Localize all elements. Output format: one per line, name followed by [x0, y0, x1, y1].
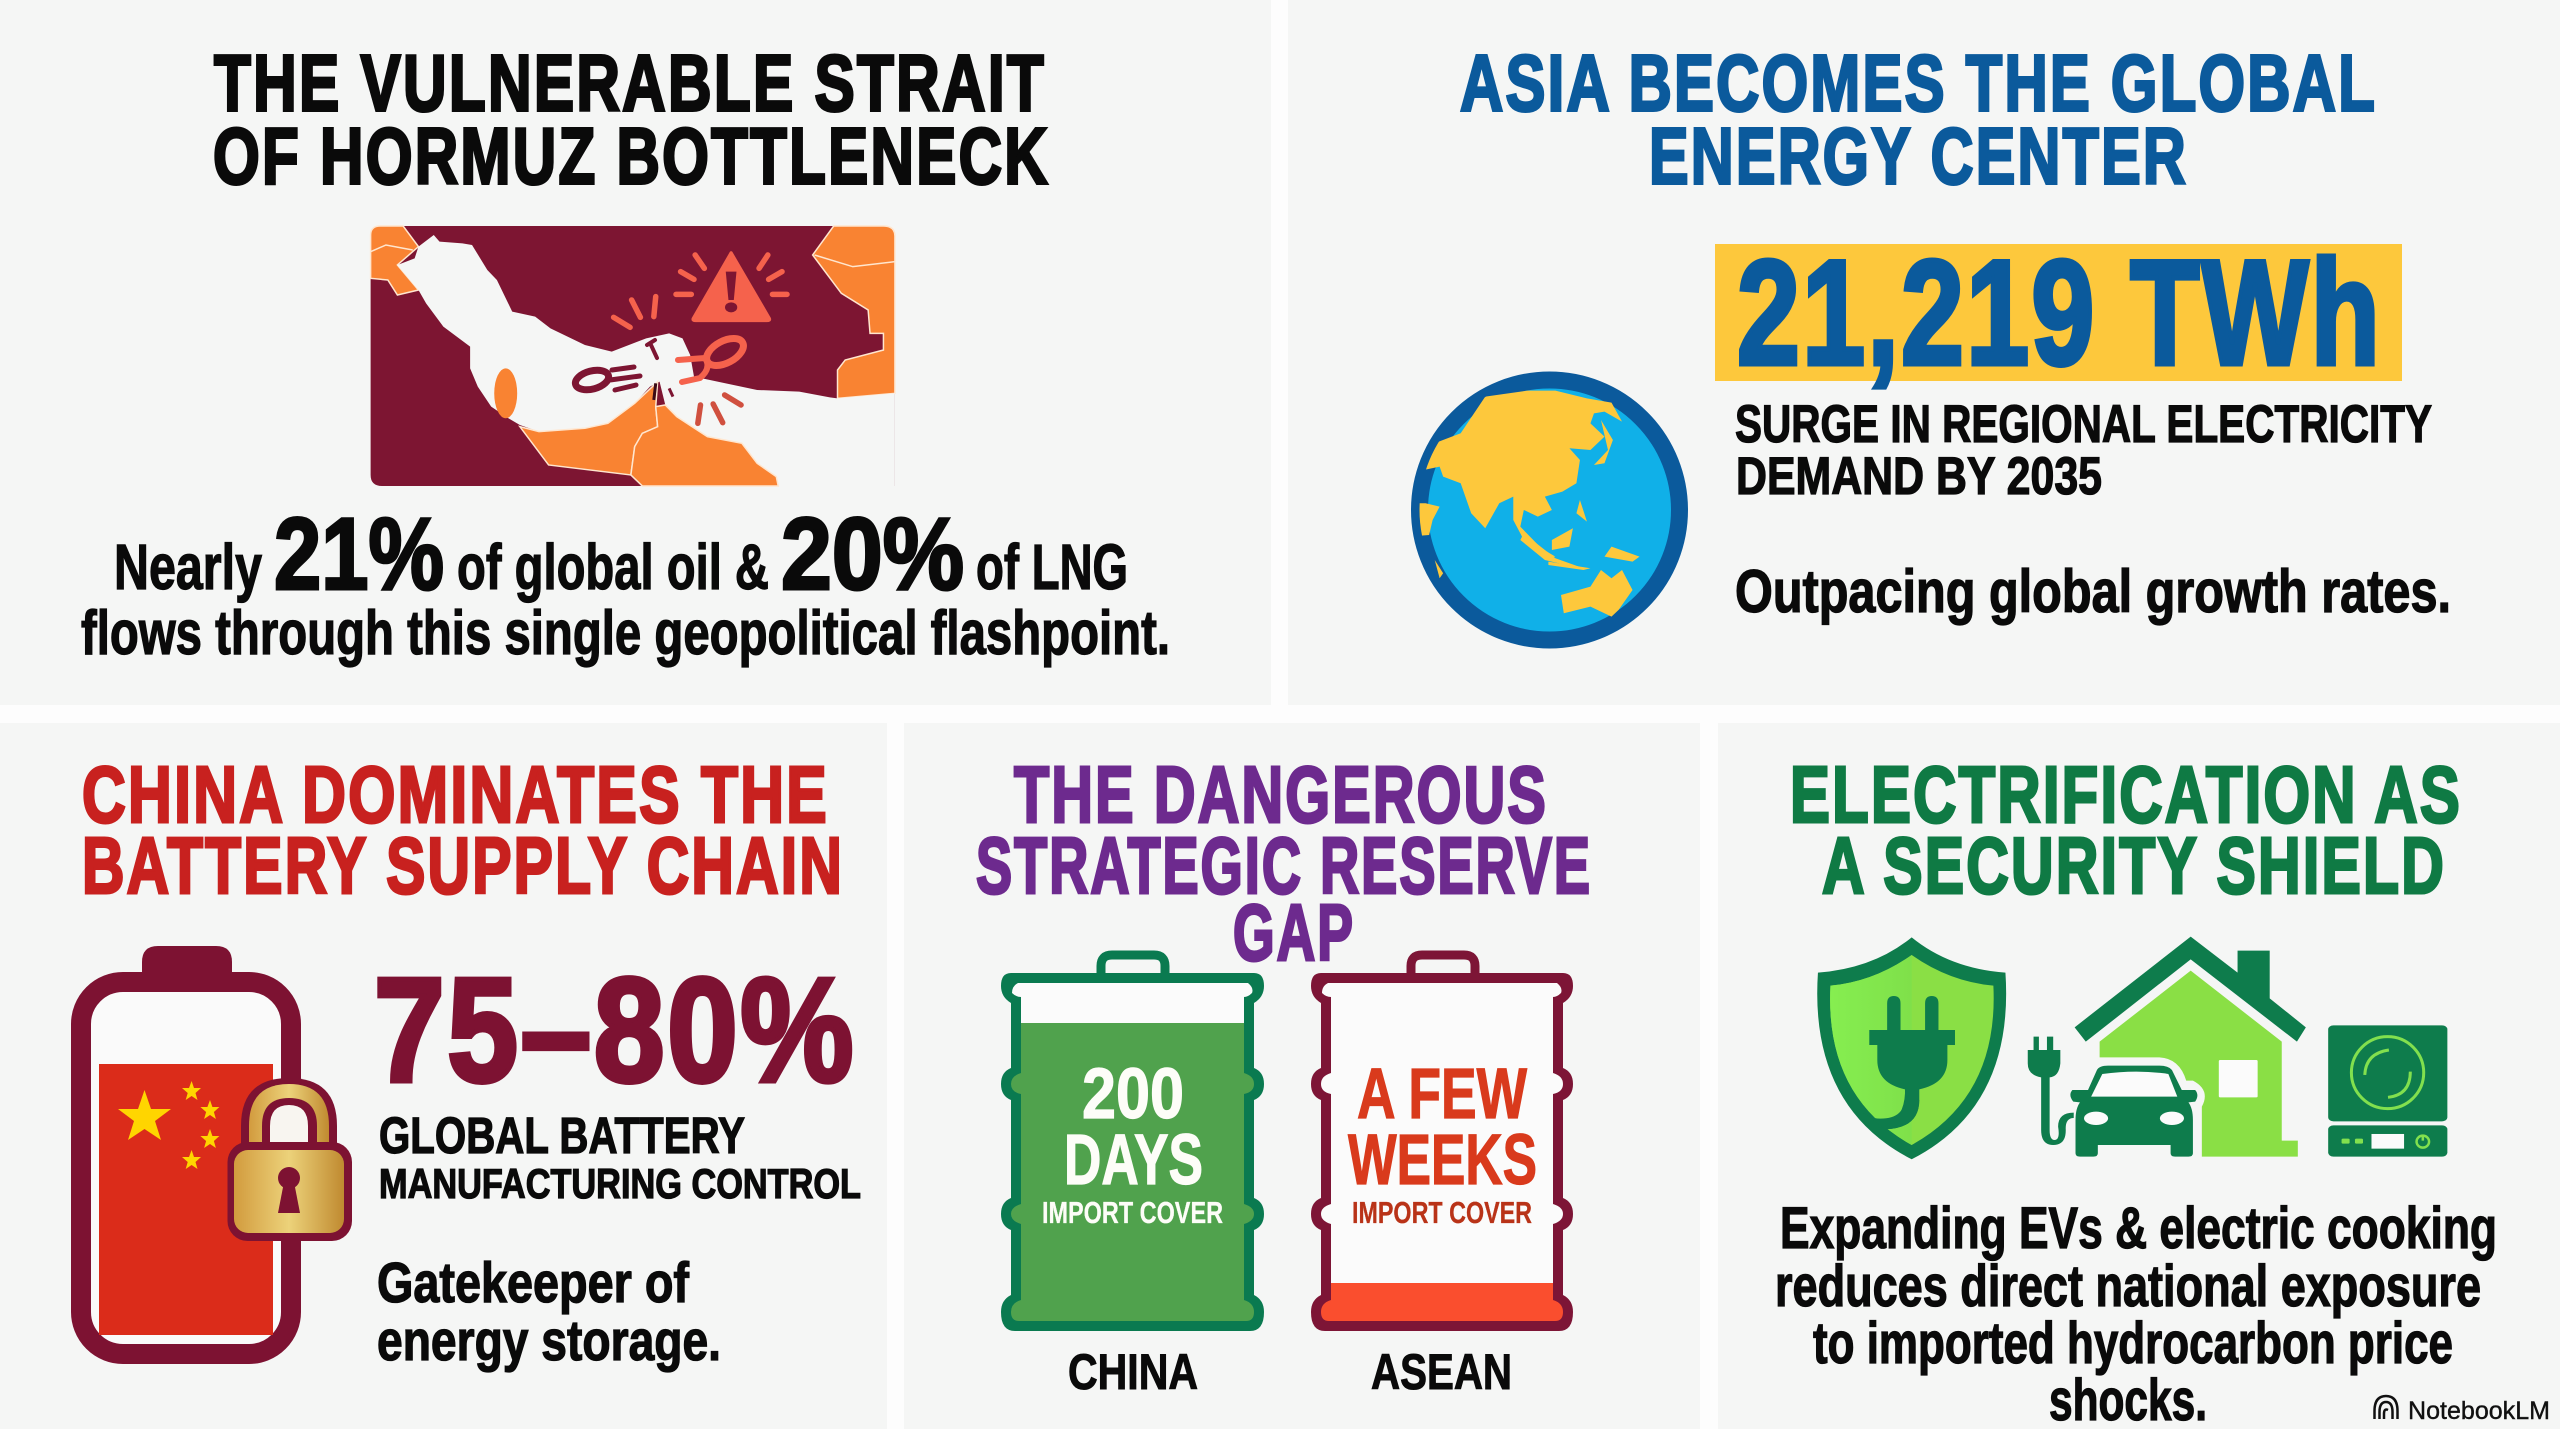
- text: 200 days import cover: [1042, 1055, 1223, 1230]
- text: gatekeeper of energy storage: energy storage.: [377, 1309, 721, 1373]
- text: surge in regional demand: [1735, 395, 2432, 506]
- heading: dangerous strategic reserve gap: STRATEGIC RESERVE: [976, 821, 1592, 910]
- icon: electric car and charger: [2028, 1037, 2197, 1157]
- text: electrification benefit: [1775, 1196, 2497, 1429]
- icons: shield, EV, house and stove: [1817, 937, 2447, 1159]
- heading: Asia becomes the global energy center: [1460, 38, 2377, 200]
- heading: China dominates: CHINA DOMINATES THE: [82, 750, 829, 839]
- heading: dangerous strategic reserve gap: GAP: [1233, 888, 1355, 977]
- panel: strategic reserve gap: [904, 723, 1700, 1429]
- icon: China oil drum, 200 days: [1001, 955, 1264, 1331]
- icon: gold padlock: [228, 1078, 352, 1241]
- heading: Asia becomes the global energy center: ENERGY CENTER: [1649, 112, 2188, 200]
- heading: China dominates: BATTERY SUPPLY CHAIN: [82, 821, 844, 910]
- icon: globe centred on Asia: [1408, 380, 1680, 640]
- text: oil and LNG share: of global oil &: [457, 531, 769, 603]
- icon: house: [2075, 937, 2306, 1157]
- stat: 75-80%: 75–80%: [374, 948, 856, 1113]
- text: surge in regional demand: DEMAND BY 2035: [1736, 447, 2102, 506]
- text: oil and LNG share: Nearly: [114, 531, 262, 603]
- text: global battery manufacturing control: MANUFACTURING CONTROL: [379, 1160, 861, 1207]
- text: oil and LNG share: of LNG: [976, 531, 1128, 603]
- text: oil and LNG share: 20%: [781, 497, 964, 611]
- logo: NotebookLM watermark: NotebookLM: [2408, 1397, 2550, 1425]
- map: Persian Gulf with broken chain and warning: [371, 226, 895, 486]
- heading: vulnerable strait: [213, 38, 1050, 200]
- panel: Asia energy center: [1410, 54, 2448, 648]
- text: gatekeeper of energy storage: [377, 1251, 721, 1373]
- text: 200 days import cover: DAYS: [1064, 1121, 1203, 1200]
- icon: induction stove: [2328, 1025, 2447, 1157]
- text: a few weeks import cover: WEEKS: [1348, 1121, 1537, 1200]
- panel: China battery supply chain: [0, 723, 887, 1429]
- text: oil and LNG share: flows through this single geopolitical flashpoint.: [81, 599, 1170, 668]
- text: a few weeks import cover: IMPORT COVER: [1352, 1195, 1532, 1230]
- panel: Strait of Hormuz bottleneck: [0, 0, 1271, 705]
- panel: electrification as a security shield: [1718, 723, 2560, 1429]
- heading: electrification security shield: [1790, 750, 2462, 910]
- text: gatekeeper of energy storage: Gatekeeper of: [377, 1251, 690, 1315]
- heading: vulnerable strait: THE VULNERABLE STRAIT: [214, 38, 1046, 128]
- heading: China dominates: [82, 750, 844, 910]
- icon: shield with plug: [1817, 937, 2006, 1159]
- heading: dangerous strategic reserve gap: [976, 750, 1592, 977]
- text: 200 days import cover: IMPORT COVER: [1042, 1195, 1223, 1230]
- label: China: CHINA: [1068, 1344, 1198, 1400]
- text: global battery manufacturing control: [379, 1107, 861, 1207]
- icon: battery with Chinese flag and padlock: [81, 946, 352, 1354]
- text: a few weeks import cover: A FEW: [1357, 1055, 1527, 1134]
- label: ASEAN: ASEAN: [1371, 1344, 1512, 1400]
- icon: ASEAN oil drum, a few weeks: [1311, 955, 1573, 1331]
- text: global battery manufacturing control: GLOBAL BATTERY: [379, 1107, 745, 1164]
- text: a few weeks import cover: [1348, 1055, 1537, 1230]
- text: oil and LNG share: 21%: [274, 497, 444, 611]
- text: 200 days import cover: 200: [1082, 1055, 1184, 1134]
- heading: dangerous strategic reserve gap: THE DANGEROUS: [1014, 750, 1548, 839]
- text: oil and LNG share: [81, 497, 1170, 668]
- heading: vulnerable strait: OF HORMUZ BOTTLENECK: [213, 112, 1050, 200]
